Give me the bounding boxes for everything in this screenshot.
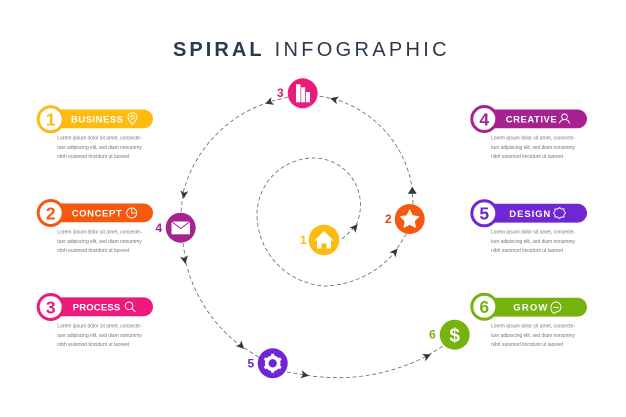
card 1: business: Lorem ipsum dolor sit amet, consecte- — [57, 136, 142, 142]
node 4: mail — [156, 213, 196, 243]
card 5: design: nibh euismod tincidunt ut laoreet — [491, 248, 564, 254]
card 5: design: DESIGN — [509, 209, 550, 220]
arrowheads — [180, 94, 433, 380]
node 2: star — [385, 204, 425, 234]
card 6: grow: tuer adipiscing elit, sed diam nonummy — [491, 333, 576, 339]
icon: magnifier — [125, 302, 136, 312]
card 6: grow: nibh euismod tincidunt ut laoreet — [491, 342, 564, 348]
card 2: concept: tuer adipiscing elit, sed diam nonummy — [57, 239, 142, 245]
card 2: concept: Lorem ipsum dolor sit amet, consecte- — [57, 230, 142, 236]
card 6: grow: 6 — [479, 297, 489, 317]
card 1: business — [38, 107, 153, 160]
card 4: creative — [472, 106, 587, 160]
card 3: process: 3 — [46, 297, 56, 317]
card 2: concept: CONCEPT — [72, 208, 122, 220]
card 4: creative: CREATIVE — [506, 114, 557, 126]
card 5: design — [472, 201, 587, 254]
icon: pie chart — [127, 208, 137, 218]
icon: speech bubble — [551, 302, 561, 314]
card 2: concept — [38, 200, 153, 254]
card 3: process: nibh euismod tincidunt ut laoreet — [57, 342, 130, 348]
icon: map pin — [128, 113, 137, 124]
title: SPIRAL INFOGRAPHIC — [173, 39, 450, 61]
card 4: creative: Lorem ipsum dolor sit amet, consecte- — [491, 136, 575, 142]
icon: puzzle cross — [554, 208, 566, 218]
card 1: business: tuer adipiscing elit, sed diam nonummy — [57, 145, 142, 151]
card 3: process: tuer adipiscing elit, sed diam nonummy — [57, 333, 142, 339]
card 4: creative: nibh euismod tincidunt ut laoreet — [491, 154, 564, 160]
node 5: gear: 5 — [248, 356, 254, 370]
card 5: design: 5 — [479, 204, 489, 224]
node 4: mail: 4 — [156, 221, 162, 235]
card 6: grow — [472, 294, 587, 348]
card 2: concept: 2 — [46, 203, 56, 223]
node 2: star: 2 — [385, 212, 392, 226]
node 3: bar chart — [277, 78, 318, 108]
node 6: dollar: 6 — [429, 328, 436, 342]
node 3: bar chart: 3 — [277, 86, 284, 100]
card 5: design: Lorem ipsum dolor sit amet, consecte- — [491, 230, 575, 236]
card 2: concept: nibh euismod tincidunt ut laoreet — [57, 248, 130, 254]
icon: user — [560, 114, 570, 124]
node 1: home: 1 — [300, 233, 307, 247]
card 3: process — [38, 294, 153, 348]
card 1: business: 1 — [46, 110, 56, 130]
node 6: dollar — [429, 320, 470, 350]
node 6: dollar: $ — [449, 326, 460, 346]
node 5: gear — [248, 348, 288, 378]
spiral path — [181, 96, 443, 378]
node 1: home — [300, 225, 339, 255]
card 5: design: tuer adipiscing elit, sed diam nonummy — [491, 239, 576, 245]
card 4: creative: tuer adipiscing elit, sed diam nonummy — [491, 145, 576, 151]
card 3: process: Lorem ipsum dolor sit amet, consecte- — [57, 324, 142, 330]
card 6: grow: GROW — [513, 303, 547, 314]
card 1: business: BUSINESS — [71, 115, 123, 126]
card 1: business: nibh euismod tincidunt ut laoreet — [57, 154, 130, 160]
card 4: creative: 4 — [479, 109, 489, 129]
card 3: process: PROCESS — [73, 302, 120, 314]
card 6: grow: Lorem ipsum dolor sit amet, consecte- — [491, 324, 575, 330]
